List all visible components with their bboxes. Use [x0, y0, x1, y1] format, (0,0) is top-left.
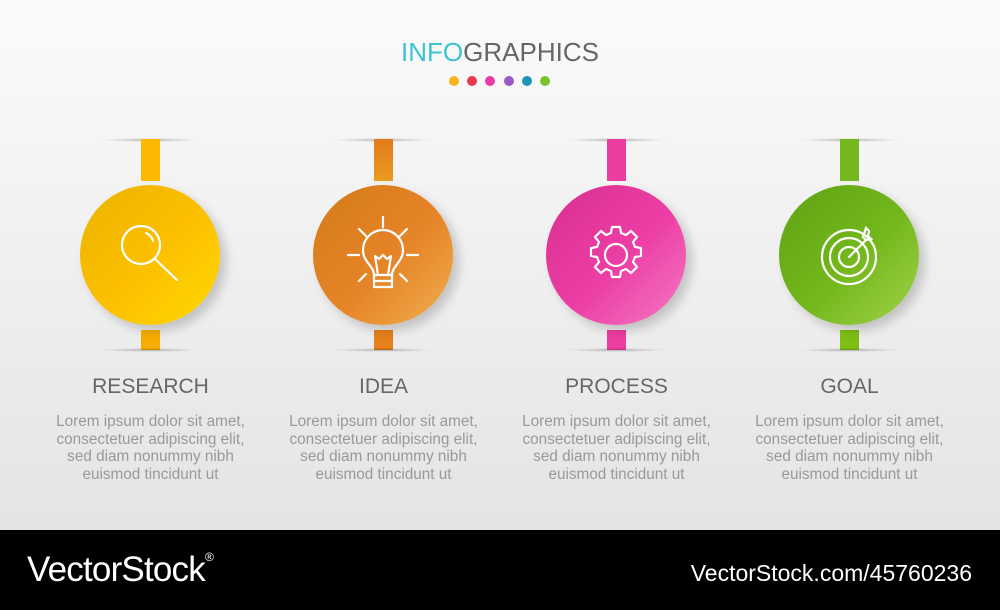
- text: goal: euismod tincidunt ut: [781, 466, 918, 482]
- footer url: VectorStock.com/45760236: [691, 560, 972, 586]
- text: research: [56, 413, 245, 482]
- text: process: euismod tincidunt ut: [548, 466, 685, 482]
- heading: research: RESEARCH: [92, 375, 209, 398]
- circle: process icon: [546, 185, 686, 325]
- step: process: [522, 138, 711, 482]
- heading: goal: GOAL: [820, 375, 879, 398]
- circle: goal icon: [779, 185, 919, 325]
- step: goal: [755, 138, 944, 482]
- text: goal: consectetuer adipiscing elit,: [756, 430, 943, 448]
- footer bar: [0, 530, 1000, 610]
- color dots: [449, 76, 550, 86]
- text: idea: sed diam nonummy nibh: [300, 448, 467, 465]
- footer logo text: VectorStock®: [27, 550, 213, 589]
- text: idea: euismod tincidunt ut: [315, 466, 452, 482]
- text: goal: Lorem ipsum dolor sit amet,: [755, 413, 944, 430]
- text: idea: Lorem ipsum dolor sit amet,: [289, 413, 478, 430]
- text: goal: sed diam nonummy nibh: [766, 448, 933, 465]
- heading: process: PROCESS: [565, 375, 668, 398]
- title: INFOGRAPHICS: [401, 37, 599, 67]
- text: idea: consectetuer adipiscing elit,: [290, 430, 477, 448]
- text: process: sed diam nonummy nibh: [533, 448, 700, 465]
- text: idea: [289, 413, 478, 482]
- heading: idea: IDEA: [359, 375, 408, 398]
- step: research: [56, 138, 245, 482]
- text: research: sed diam nonummy nibh: [67, 448, 234, 465]
- text: research: Lorem ipsum dolor sit amet,: [56, 413, 245, 430]
- text: process: Lorem ipsum dolor sit amet,: [522, 413, 711, 430]
- circle: research icon: [80, 185, 220, 325]
- text: goal: [755, 413, 944, 482]
- text: research: euismod tincidunt ut: [82, 466, 219, 482]
- text: process: [522, 413, 711, 482]
- text: process: consectetuer adipiscing elit,: [523, 430, 710, 448]
- circle: idea icon: [313, 185, 453, 325]
- step: idea: [289, 138, 478, 482]
- text: research: consectetuer adipiscing elit,: [57, 430, 244, 448]
